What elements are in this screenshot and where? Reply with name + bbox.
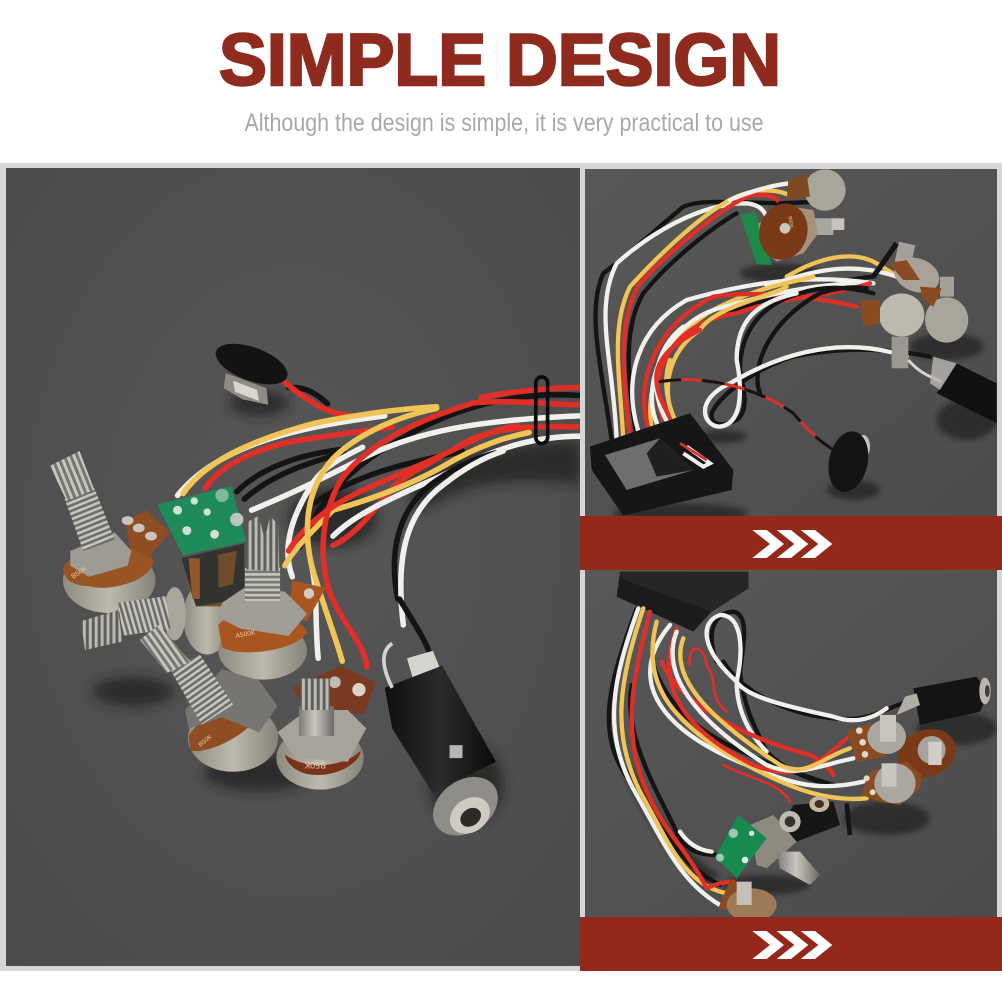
twisted red wire [690,649,790,802]
wires left group [595,183,820,440]
wire bundle [178,383,580,667]
panel: top-right product photo [585,169,997,523]
pcb and pot [715,811,820,885]
cable tie [536,377,548,444]
twisted battery leads [660,380,833,450]
shadows under wiring [92,390,580,825]
pot: lower left: B50K [197,733,214,749]
pot with circuit board: B50K [786,216,794,230]
pcb [157,486,246,606]
pot: left top: B50K [70,565,89,581]
panel: bottom-right product photo [585,570,997,922]
pot bottom [718,880,777,917]
wires fan group [650,622,867,799]
band: bottom arrow banner [580,917,1002,971]
control box [617,572,748,632]
pot: left top [50,451,170,613]
pot: centre: A500K [235,629,257,640]
black and white looped cable [705,288,930,427]
pot: lower right B50K: B50K [304,760,326,770]
battery snap [828,431,870,492]
icon: chevrons top [752,530,832,558]
wires left group [609,608,733,905]
shadows [613,263,997,523]
battery snap [780,796,850,842]
icon: battery snap [216,344,288,405]
wires right group [630,254,918,432]
wire loop to jack [707,612,907,785]
icon: chevrons bottom [752,931,832,959]
subtitle: Although the design is simple, it is very practical to use [244,109,764,137]
pot: horizontal [81,576,224,654]
jack [382,642,498,836]
jack [908,357,997,423]
shadows [623,712,997,895]
pot: lower left [140,625,278,772]
band: top arrow banner [580,516,1002,570]
pot: lower right B50K [276,666,376,790]
pot: centre [218,516,326,680]
control box [590,413,733,516]
pots right [847,715,963,805]
panel: large product photo [6,168,580,966]
title: SIMPLE DESIGN [219,20,781,101]
pot with circuit board [740,169,846,265]
three potentiometers [860,242,968,368]
jack [897,677,991,725]
